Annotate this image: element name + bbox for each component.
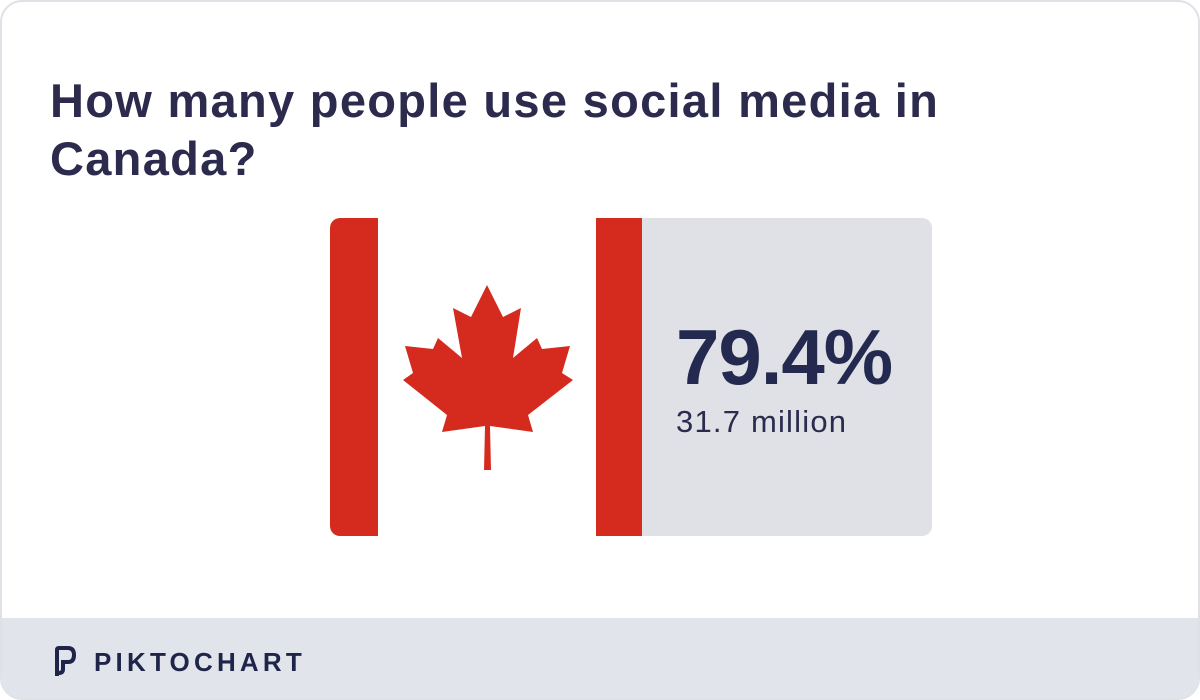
footer [2,618,1200,700]
title: How many people use social media in [50,74,939,127]
logo [55,646,306,676]
flag left red bar [330,218,378,536]
logo text: PIKTOCHART [94,646,306,676]
population: 31.7 million [676,404,847,439]
stat panel [642,218,932,536]
logo icon [55,646,76,676]
flag panel [330,218,932,536]
percent: 79.4% [676,313,892,401]
flag right red bar [596,218,642,536]
title: Canada? [50,132,258,185]
title [50,74,939,185]
